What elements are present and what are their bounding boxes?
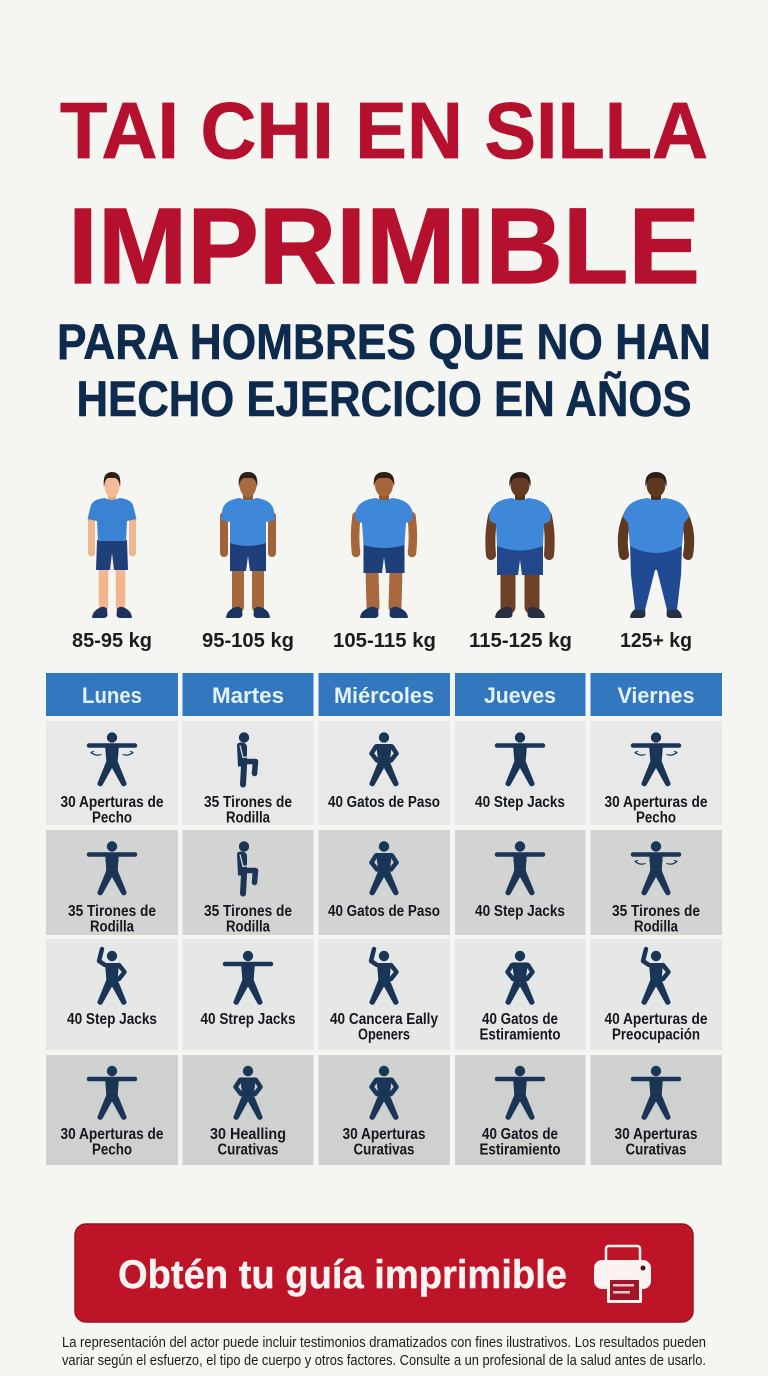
cell: Lunes 1: Pecho — [92, 810, 132, 826]
cell: Jueves 4 — [455, 1055, 586, 1165]
header: days: Jueves — [484, 683, 556, 708]
cell: Lunes 1 — [46, 721, 178, 826]
title: TAI CHI EN SILLA — [60, 86, 708, 175]
header: days: Miércoles — [334, 683, 434, 708]
cell: Lunes 4: 30 Aperturas de — [60, 1126, 164, 1143]
cell: Martes 4: 30 Healling — [210, 1126, 286, 1143]
cell: Miercoles 3 — [318, 939, 450, 1050]
cell: Martes 4 — [182, 1055, 314, 1165]
cell: Lunes 2 — [46, 830, 178, 936]
cell: Martes 2 — [182, 830, 314, 936]
cell: Viernes 1 — [590, 721, 722, 826]
cell: Viernes 1: 30 Aperturas de — [604, 794, 708, 811]
row 1 — [46, 721, 722, 826]
cell: Jueves 3 — [455, 939, 586, 1050]
cell: Viernes 4: 30 Aperturas — [614, 1126, 698, 1143]
cell: Jueves 1: 40 Step Jacks — [475, 794, 565, 811]
cell: Jueves 2: 40 Step Jacks — [475, 903, 565, 920]
cell: Jueves 4: Estiramiento — [480, 1142, 561, 1158]
cell: Jueves 4: 40 Gatos de — [482, 1126, 558, 1143]
cell: Miercoles 4 — [318, 1055, 450, 1165]
cell: Miercoles 1 — [318, 721, 450, 825]
header: days: Martes — [212, 683, 284, 708]
cell: Martes 2: 35 Tirones de — [204, 903, 292, 920]
cell: Viernes 2: Rodilla — [634, 918, 678, 936]
header: days: Lunes — [82, 683, 142, 708]
weight labels: 125+ kg — [620, 630, 692, 652]
figure: 85-95 kg — [88, 472, 136, 618]
figure: 115-125 kg — [489, 472, 551, 618]
button label: Obtén tu guía imprimible — [118, 1253, 567, 1297]
cell: Lunes 4: Pecho — [92, 1142, 132, 1158]
cell: Lunes 2: 35 Tirones de — [68, 903, 156, 920]
cell: Lunes 2: Rodilla — [90, 918, 134, 936]
cell: Miercoles 2: 40 Gatos de Paso — [328, 903, 440, 920]
cell: Viernes 4: Curativas — [626, 1142, 687, 1158]
cell: Jueves 1 — [455, 721, 586, 825]
row 3 — [46, 939, 722, 1050]
figure: 95-105 kg — [221, 472, 275, 618]
row 2 — [46, 830, 722, 936]
cell: Martes 1: Rodilla — [226, 810, 270, 826]
subtitle: HECHO EJERCICIO EN AÑOS — [76, 371, 692, 427]
cell: Miercoles 4: 30 Aperturas — [342, 1126, 426, 1143]
weight labels: 115-125 kg — [469, 630, 572, 652]
cell: Martes 1: 35 Tirones de — [204, 794, 292, 811]
cell: Viernes 1: Pecho — [636, 810, 676, 826]
cell: Martes 3 — [182, 939, 314, 1050]
cell: Miercoles 1: 40 Gatos de Paso — [328, 794, 440, 811]
title: IMPRIMIBLE — [68, 185, 700, 306]
header: days — [46, 673, 722, 716]
disclaimer — [62, 1334, 706, 1369]
cell: Martes 1 — [182, 721, 314, 826]
cell: Jueves 3: 40 Gatos de — [482, 1011, 558, 1028]
cell: Miercoles 4: Curativas — [354, 1142, 415, 1158]
cell: Lunes 3: 40 Step Jacks — [67, 1011, 157, 1028]
cell: Lunes 1: 30 Aperturas de — [60, 794, 164, 811]
header: days: Viernes — [618, 683, 694, 708]
title — [60, 86, 708, 306]
weight labels: 85-95 kg — [72, 630, 152, 652]
cell: Martes 4: Curativas — [218, 1142, 279, 1158]
cell: Miercoles 3: 40 Cancera Eally — [330, 1011, 438, 1028]
cell: Martes 2: Rodilla — [226, 918, 270, 936]
weight labels — [72, 630, 692, 652]
cell: Miercoles 3: Openers — [358, 1026, 410, 1044]
cell: Miercoles 2 — [318, 830, 450, 935]
cell: Viernes 3 — [590, 939, 722, 1050]
icon: printer — [594, 1246, 651, 1303]
call to action button — [75, 1224, 693, 1322]
cell: Viernes 2: 35 Tirones de — [612, 903, 700, 920]
figure: 125+ kg — [623, 472, 689, 618]
weekly exercise table — [46, 673, 722, 1165]
cell: Martes 3: 40 Strep Jacks — [200, 1011, 296, 1028]
body type row — [72, 472, 692, 652]
cell: Lunes 3 — [46, 939, 178, 1050]
row 4 — [46, 1055, 722, 1165]
weight labels: 95-105 kg — [202, 630, 294, 652]
cell: Jueves 2 — [455, 830, 586, 935]
cell: Jueves 3: Estiramiento — [480, 1026, 561, 1044]
cell: Viernes 4 — [590, 1055, 722, 1165]
cell: Lunes 4 — [46, 1055, 178, 1165]
weight labels: 105-115 kg — [333, 630, 436, 652]
cell: Viernes 2 — [590, 830, 722, 936]
cell: Viernes 3: 40 Aperturas de — [604, 1011, 708, 1028]
cell: Viernes 3: Preocupación — [612, 1026, 700, 1044]
figure: 105-115 kg — [355, 472, 413, 618]
subtitle — [57, 314, 711, 427]
